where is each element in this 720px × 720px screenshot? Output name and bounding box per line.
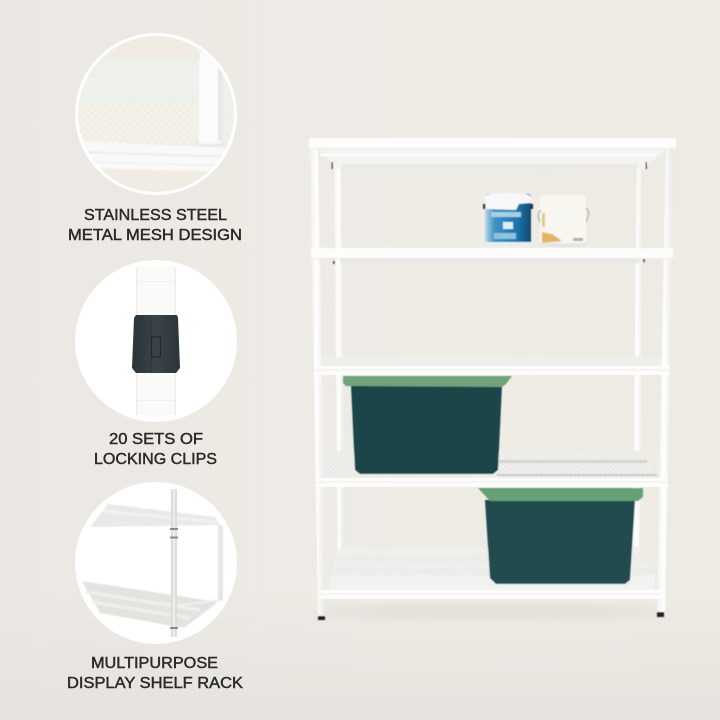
panel: multipurpose rack feature <box>67 482 244 692</box>
paint can: white <box>538 195 588 247</box>
panel: locking clips feature <box>75 260 237 468</box>
heading: 20 sets of locking clips: 20 SETS OF <box>109 431 203 448</box>
fourth shelf mesh <box>316 451 660 479</box>
heading: stainless steel metal mesh design: METAL MESH DESIGN <box>68 227 242 244</box>
heading: multipurpose display shelf rack <box>67 655 244 692</box>
icon: mesh shelf close-up in circle <box>70 30 240 200</box>
heading: stainless steel metal mesh design <box>68 207 242 244</box>
storage box: upper <box>343 376 512 474</box>
floor shadow <box>315 605 665 619</box>
icon: locking clip on post <box>75 260 237 422</box>
heading: 20 sets of locking clips: LOCKING CLIPS <box>94 451 217 468</box>
paint cans <box>483 193 588 247</box>
heading: stainless steel metal mesh design: STAINLESS STEEL <box>84 207 227 224</box>
panel: stainless steel mesh feature <box>68 30 242 244</box>
shelf rack <box>309 138 676 620</box>
heading: multipurpose display shelf rack: MULTIPURPOSE <box>91 655 218 672</box>
storage box: lower <box>478 488 643 584</box>
third shelf deck <box>314 357 670 367</box>
paint can: blue <box>483 193 533 247</box>
top shelf tray <box>318 149 668 169</box>
icon: rack close-up in circle <box>75 482 237 644</box>
heading: 20 sets of locking clips <box>94 431 217 468</box>
clips <box>332 162 647 264</box>
bottom shelf mesh <box>325 547 657 591</box>
back posts <box>334 165 644 572</box>
front posts <box>310 142 674 620</box>
heading: multipurpose display shelf rack: DISPLAY SHELF RACK <box>67 675 244 692</box>
shelf front bars <box>309 138 676 599</box>
